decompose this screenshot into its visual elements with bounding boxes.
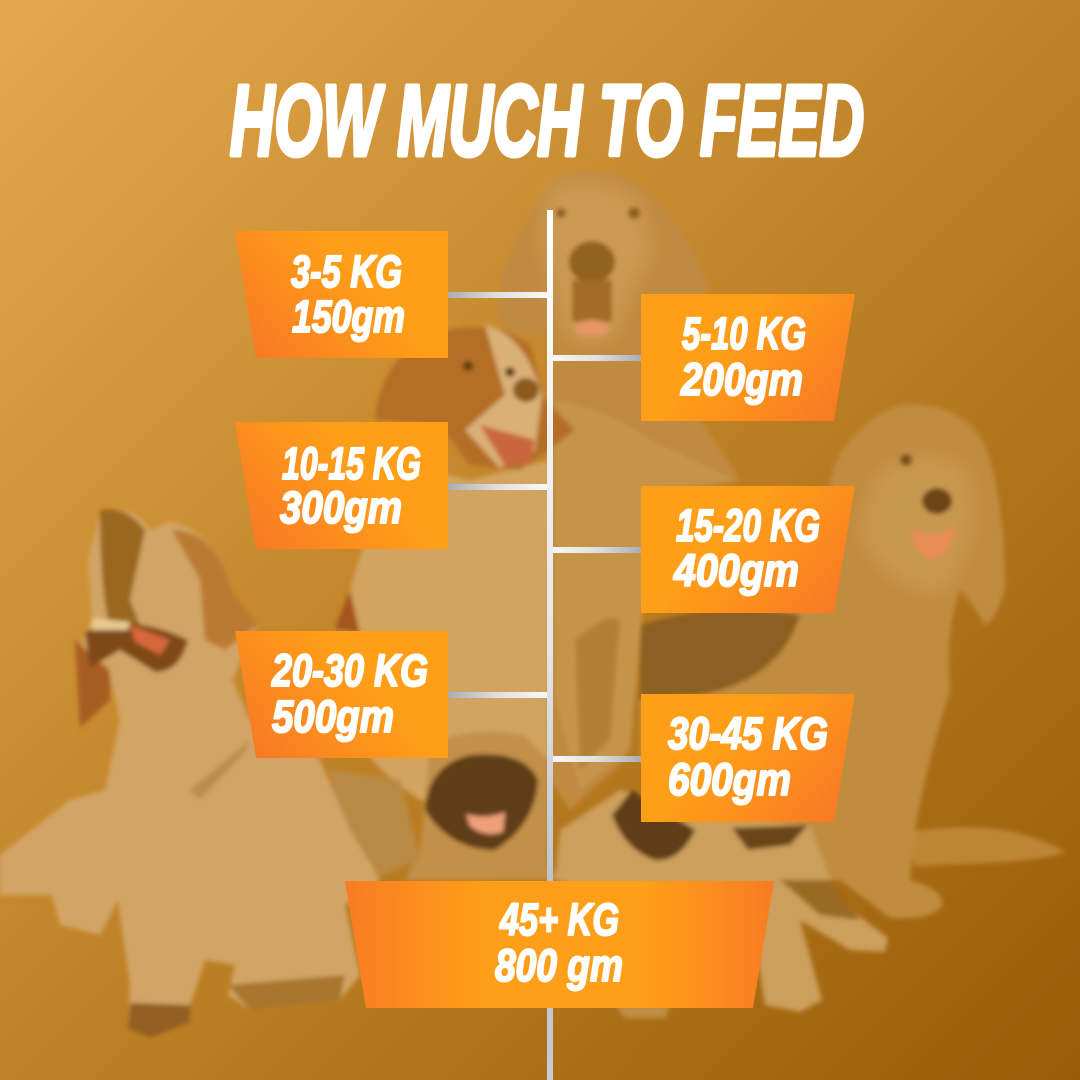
dog: howling hound on the left bbox=[0, 509, 420, 1038]
card: 20-30 KG bbox=[235, 631, 448, 758]
card: 15-20 KG: 400gm bbox=[673, 545, 799, 596]
card: 20-30 KG: 20-30 KG bbox=[271, 645, 428, 696]
card: 3-5 KG: 150gm bbox=[292, 291, 405, 342]
card: 15-20 KG bbox=[641, 486, 855, 613]
card: 10-15 KG: 10-15 KG bbox=[282, 438, 421, 489]
card: 5-10 KG: 200gm bbox=[680, 354, 803, 405]
card: 30-45 KG bbox=[641, 694, 855, 822]
dog: shaggy sheepdog on the right bbox=[640, 404, 1066, 918]
card: 30-45 KG: 600gm bbox=[668, 754, 791, 805]
card: 5-10 KG bbox=[641, 294, 855, 421]
dog: spotted dog at the bottom right bbox=[555, 790, 888, 1018]
photo: group of dogs tinted orange bbox=[0, 170, 1066, 1038]
central pole with connectors bbox=[448, 210, 641, 1080]
card: 15-20 KG: 15-20 KG bbox=[676, 500, 820, 551]
card: 10-15 KG bbox=[235, 422, 448, 549]
card: 45+ KG: 45+ KG bbox=[499, 894, 619, 945]
dog: pug at the bottom centre bbox=[405, 732, 580, 880]
card: 45+ KG bbox=[345, 881, 774, 1008]
card: 10-15 KG: 300gm bbox=[280, 482, 402, 533]
dog: setter in the centre bbox=[497, 170, 740, 810]
card: 30-45 KG: 30-45 KG bbox=[668, 708, 828, 759]
card: 45+ KG: 800 gm bbox=[495, 940, 623, 991]
dog: spaniel centre-left bbox=[335, 325, 575, 800]
card: 3-5 KG: 3-5 KG bbox=[291, 246, 402, 297]
card: 3-5 KG bbox=[235, 231, 448, 358]
card: 20-30 KG: 500gm bbox=[272, 691, 394, 742]
card: 5-10 KG: 5-10 KG bbox=[682, 308, 806, 359]
